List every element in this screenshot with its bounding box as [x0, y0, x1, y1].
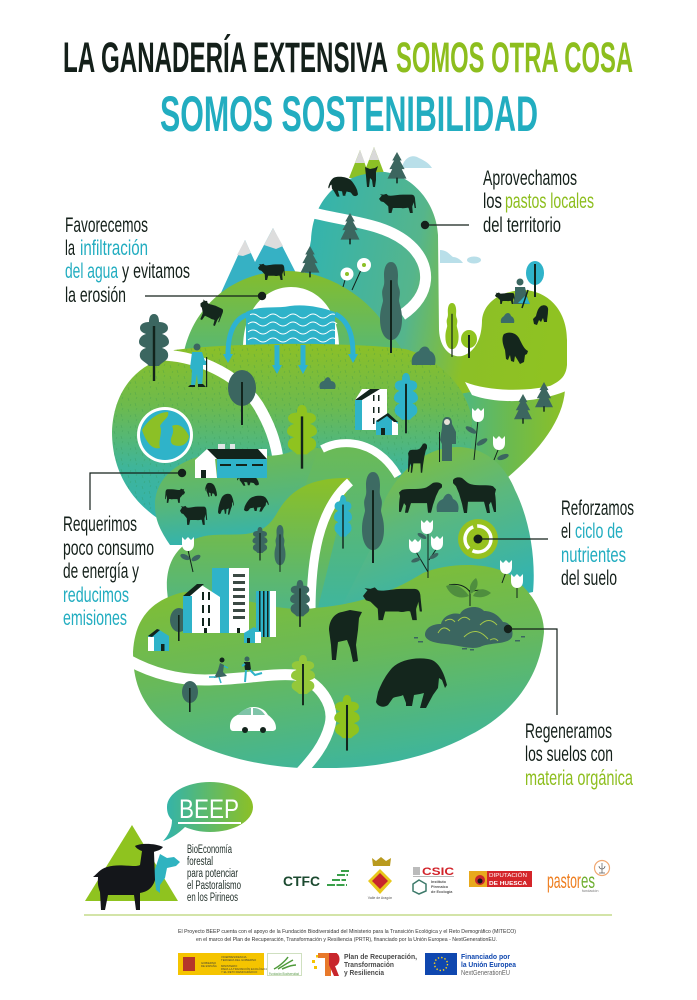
farmer man — [188, 344, 207, 387]
BEEP description: el Pastoralismo — [187, 880, 241, 892]
callout: pastos: del territorio — [483, 214, 561, 237]
seated shepherd — [513, 278, 530, 308]
callout: energia — [63, 469, 186, 630]
logo: CSIC — [413, 866, 454, 894]
white road right — [465, 372, 568, 401]
blue tree — [526, 261, 544, 297]
BEEP logo — [85, 782, 253, 910]
flower leaves — [179, 425, 509, 564]
logo: Union Europea — [425, 952, 517, 977]
callout: materia organica — [504, 625, 633, 790]
cow on lobe large — [502, 333, 528, 364]
lawn texture — [112, 344, 472, 520]
BEEP description — [187, 844, 241, 904]
large cow right — [363, 587, 422, 620]
logo: Gobierno de Espana: GOBIERNO — [201, 961, 217, 965]
logo: Gobierno de Espana: DE ESPAÑA — [201, 963, 217, 968]
callout: materia organica: los suelos con — [525, 743, 613, 766]
BEEP description: forestal — [187, 856, 213, 868]
logo: Diputacion de Huesca: DIPUTACIÓN — [489, 872, 527, 879]
title: LA GANADERÍA EXTENSIVA — [63, 34, 388, 82]
callout: energia: poco consumo — [63, 537, 154, 560]
city back hill — [167, 478, 350, 620]
callout: pastos: pastos locales — [505, 190, 594, 213]
factory — [195, 444, 267, 478]
logo: CSIC: Pirenaico — [431, 885, 449, 889]
logo: Plan de Recuperacion — [312, 952, 417, 977]
logo: Plan de Recuperacion: Plan de Recuperación, — [344, 952, 417, 961]
logo: Union Europea: la Unión Europea — [461, 960, 517, 969]
infiltration water — [243, 287, 339, 348]
callout: materia organica: Regeneramos — [525, 720, 612, 743]
logo: pastores: pastor — [547, 870, 581, 893]
lower right hill — [430, 390, 565, 478]
callout: nutrientes: ciclo de — [575, 520, 623, 543]
callout: nutrientes: Reforzamos — [561, 497, 634, 520]
round lime tree — [461, 330, 477, 358]
funding note — [178, 929, 516, 943]
small mountains — [349, 147, 386, 178]
logo: CSIC: Instituto — [431, 880, 447, 884]
logo: Fundacion Biodiversidad — [268, 954, 302, 976]
logo: pastores: es — [581, 870, 595, 893]
logo: CSIC: CSIC — [422, 866, 454, 878]
globe — [137, 407, 193, 463]
funding note: en el marco del Plan de Recuperación, Transformación y Resiliencia (PRTR), financiado por la Unión Europea - NextGenerationEU. — [196, 937, 497, 943]
tulips — [188, 420, 517, 598]
logo: Gobierno de Espana: MINISTERIO — [221, 964, 238, 968]
blue oak trees — [334, 373, 418, 549]
triangle — [85, 825, 178, 901]
cow front top — [365, 166, 378, 187]
callout: agua: infiltración — [80, 237, 148, 260]
logo: CTFC — [283, 871, 350, 889]
funding note: El Proyecto BEEP cuenta con el apoyo de la Fundación Biodiversidad del Ministerio para la Transición Ecológica y el Reto Demográfico (MITECO) — [178, 929, 516, 935]
pasture cows — [165, 473, 269, 525]
landscape illustration — [112, 147, 568, 773]
BEEP wordmark: BEEP — [179, 794, 239, 824]
pasture blob — [155, 448, 350, 545]
compost pile — [414, 607, 525, 650]
daisies — [343, 270, 361, 290]
logo: Plan de Recuperacion: y Resiliencia — [344, 968, 385, 977]
animals — [165, 166, 548, 708]
light lime tree — [291, 655, 315, 705]
logo: Gobierno de Espana — [178, 953, 268, 975]
right hill — [340, 447, 534, 620]
left road — [160, 355, 278, 458]
sheep standing — [408, 443, 427, 473]
trees — [139, 152, 553, 751]
top hill and right lobe — [300, 172, 567, 500]
goats — [399, 477, 496, 513]
black sheep — [93, 844, 163, 910]
logo: coat of arms: Valle de Aragón — [368, 896, 392, 900]
BEEP description: en los Pirineos — [187, 892, 238, 904]
running man — [242, 656, 262, 682]
running girl — [209, 658, 228, 683]
BEEP description: para potenciar — [187, 868, 238, 880]
dark oak trees — [139, 314, 310, 627]
speech bubble — [163, 782, 253, 841]
shepherd dog — [495, 292, 515, 304]
front cow — [329, 610, 362, 662]
logo: Union Europea: Financiado por — [461, 952, 510, 961]
callout: materia organica: materia orgánica — [525, 767, 633, 790]
sprout — [446, 578, 491, 606]
cow on lobe small — [533, 305, 548, 325]
car — [230, 707, 276, 733]
woman — [439, 417, 456, 462]
small city house — [244, 627, 261, 643]
cow on hill slope — [194, 299, 225, 327]
cow top right — [379, 194, 416, 213]
callout: agua — [65, 214, 266, 307]
logo: Gobierno de Espana: Y EL RETO DEMOGRÁFICO — [221, 970, 258, 974]
callout: energia: reducimos — [63, 584, 129, 607]
callout: agua: la erosión — [65, 284, 126, 307]
central hump — [300, 444, 425, 620]
lobe and lower right — [430, 372, 568, 478]
nutrient cycle icon — [458, 519, 498, 559]
callout: nutrientes: el — [561, 520, 571, 543]
large poplar trees — [274, 262, 402, 572]
logo: Gobierno de Espana: PARA LA TRANSICIÓN ECOLÓGICA — [221, 966, 268, 971]
callout: pastos: Aprovechamos — [483, 167, 577, 190]
logo: Fundacion Biodiversidad: Fundación Biodiversidad — [269, 972, 299, 976]
callout: energia: Requerimos — [63, 513, 137, 536]
callout: nutrientes: del suelo — [561, 567, 617, 590]
white building — [183, 584, 220, 633]
clouds — [402, 156, 481, 264]
bushes — [319, 313, 514, 512]
lower road — [128, 660, 331, 773]
logo: Gobierno de Espana: TERCERA DEL GOBIERNO — [221, 958, 257, 962]
small left house — [148, 629, 169, 651]
callout: nutrientes — [474, 497, 634, 590]
hump road — [322, 443, 398, 476]
logo: Union Europea: NextGenerationEU — [461, 968, 510, 977]
callout: agua: Favorecemos — [65, 214, 148, 237]
logo: coat of arms — [368, 857, 392, 900]
callout: agua: y evitamos — [122, 260, 190, 283]
grazing cow large — [376, 658, 447, 708]
lime trees — [287, 303, 459, 751]
tall building — [212, 568, 249, 633]
lawn and left hill — [112, 344, 472, 520]
round dark trees — [170, 370, 256, 712]
pines — [300, 152, 553, 424]
callout: energia: de energía y — [63, 560, 139, 583]
logo: pastores — [547, 860, 610, 893]
water hill — [183, 271, 405, 358]
central road — [311, 482, 350, 612]
logo: Plan de Recuperacion: Transformación — [344, 960, 394, 969]
logo: Gobierno de Espana: VICEPRESIDENCIA — [221, 955, 247, 959]
front hill — [133, 565, 544, 768]
callout: energia: emisiones — [63, 607, 127, 630]
blue cow — [152, 854, 180, 893]
callout: agua: la — [65, 237, 75, 260]
mountains — [220, 228, 297, 295]
sheep on hill — [258, 264, 285, 280]
logo: Diputacion de Huesca: DE HUESCA — [489, 881, 527, 887]
logo: pastores: fundación — [582, 889, 598, 893]
road on top hill — [306, 211, 426, 315]
blue arrows — [223, 314, 358, 374]
callout: nutrientes: nutrientes — [561, 544, 626, 567]
BEEP description: BioEconomía — [187, 844, 232, 856]
striped building — [256, 591, 276, 637]
callout: agua: del agua — [65, 260, 118, 283]
logo: CTFC: CTFC — [283, 873, 320, 889]
logo: Diputacion de Huesca — [469, 871, 532, 887]
callout: pastos: los — [483, 190, 502, 213]
callout: pastos — [421, 167, 594, 237]
cow top left — [328, 177, 358, 197]
city buildings — [148, 568, 276, 651]
footer divider — [84, 914, 612, 916]
logo: CSIC: de Ecología — [431, 890, 453, 894]
flowers — [179, 258, 523, 598]
rural house — [355, 389, 398, 435]
